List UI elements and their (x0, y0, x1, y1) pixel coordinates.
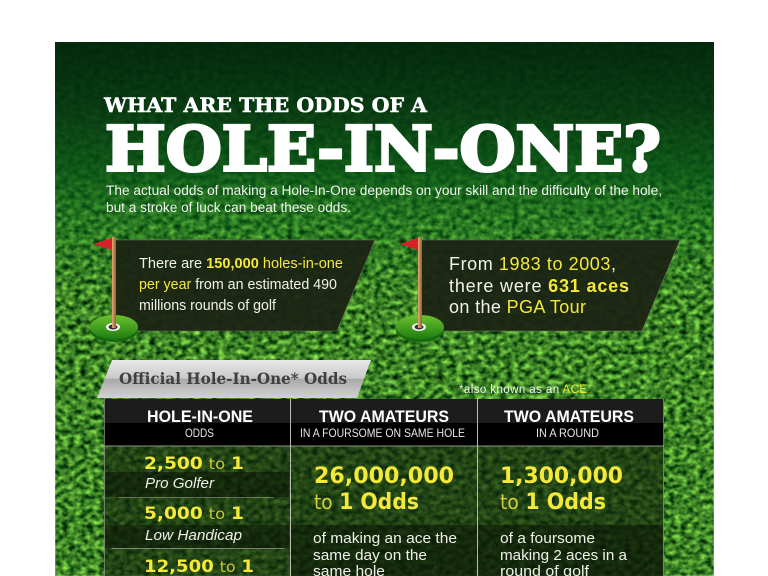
odds: low handicap: Low Handicap (145, 528, 242, 544)
table body (104, 446, 664, 576)
table (104, 398, 664, 576)
callout panel (115, 240, 375, 331)
column one heading: HOLE-IN-ONE (147, 407, 253, 426)
intro text (106, 183, 662, 215)
callout: holes-in-one per year (90, 237, 375, 342)
intro text: The actual odds of making a Hole-In-One depends on your skill and the difficulty of the hole, (106, 183, 662, 198)
callout text: From 1983 to 2003, (449, 254, 616, 274)
callout text: millions rounds of golf (139, 298, 277, 314)
callout text: on the PGA Tour (449, 297, 586, 317)
odds: pro golfer: 2,500 to 1 (144, 454, 244, 474)
column one heading (147, 407, 253, 440)
tab heading: Official Hole-In-One* Odds (119, 369, 347, 388)
odds: low handicap: 5,000 to 1 (144, 504, 244, 524)
panel: grass background (55, 42, 714, 576)
row bands (105, 472, 663, 576)
column three heading: TWO AMATEURS (504, 407, 634, 426)
column three heading: IN A ROUND (536, 426, 599, 440)
column three heading (504, 407, 634, 440)
odds: two amateurs same hole: of making an ace the (313, 530, 457, 547)
column two heading: IN A FOURSOME ON SAME HOLE (300, 426, 465, 440)
odds: two amateurs in a round: to 1 Odds (500, 490, 606, 515)
callout panel (420, 240, 680, 331)
section tab: official odds (97, 360, 371, 398)
icon: golf flag (396, 237, 444, 342)
table header (104, 399, 664, 446)
icon: golf flag (90, 237, 138, 342)
column two heading: TWO AMATEURS (319, 407, 449, 426)
callout text: there were 631 aces (449, 276, 629, 296)
footnote: *also known as an ACE (459, 384, 587, 396)
title line one: WHAT ARE THE ODDS OF A (103, 93, 427, 117)
column one heading: ODDS (185, 426, 214, 440)
title (103, 93, 661, 186)
odds: two amateurs same hole (313, 464, 457, 576)
callout text (449, 254, 629, 317)
title line two: HOLE-IN-ONE? (105, 112, 661, 186)
odds: two amateurs same hole: 26,000,000 (314, 464, 454, 489)
callout: PGA Tour aces (396, 237, 680, 342)
odds: two amateurs in a round: of a foursome (500, 530, 595, 547)
callout text: There are 150,000 holes-in-one (139, 256, 343, 272)
odds: two amateurs same hole: to 1 Odds (314, 490, 419, 515)
odds: pro golfer (144, 454, 244, 492)
odds: two amateurs same hole: same day on the (313, 547, 427, 564)
intro text: but a stroke of luck can beat these odds. (106, 200, 351, 215)
callout text (139, 256, 343, 314)
odds: two amateurs in a round (500, 464, 628, 576)
odds: pro golfer: Pro Golfer (145, 476, 215, 492)
column two heading (300, 407, 465, 440)
odds: low handicap (144, 504, 244, 544)
odds: two amateurs in a round: 1,300,000 (500, 464, 623, 489)
callout text: per year from an estimated 490 (139, 277, 337, 293)
odds: two amateurs in a round: making 2 aces in a (500, 547, 628, 564)
